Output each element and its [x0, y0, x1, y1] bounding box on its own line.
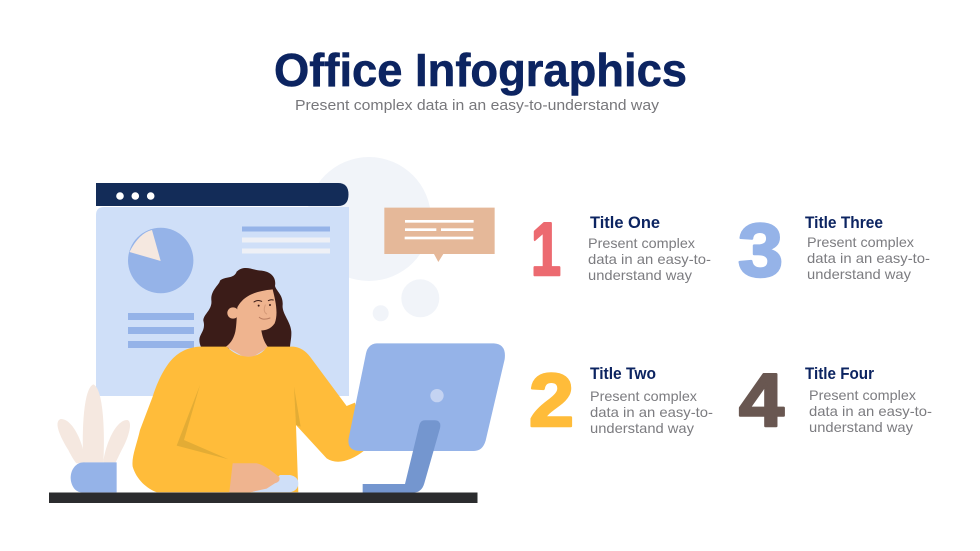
item 1 [531, 207, 711, 291]
heading: Title Four [805, 365, 875, 383]
sweater fold left [177, 385, 228, 459]
body [807, 235, 930, 282]
hair [199, 268, 291, 348]
heading: Title Two [590, 365, 656, 383]
item 4 [739, 358, 932, 442]
body: Present complex [807, 235, 914, 250]
illustration: woman at desk [49, 157, 505, 503]
speech bubble [384, 208, 495, 262]
body: understand way [590, 421, 694, 436]
item 3 [738, 208, 930, 292]
number 4: 4 [739, 358, 784, 442]
body: understand way [588, 268, 692, 283]
body: Present complex [809, 388, 916, 403]
face details [254, 300, 273, 319]
body [588, 236, 711, 283]
background circles [307, 157, 439, 321]
ear [227, 307, 239, 319]
desk [49, 492, 478, 503]
monitor [348, 343, 505, 493]
subtitle: Present complex data in an easy-to-understand way [295, 98, 660, 114]
text lines left [128, 313, 194, 348]
number 3: 3 [738, 208, 783, 292]
body: data in an easy-to- [807, 251, 930, 266]
number 1: 1 [531, 207, 561, 291]
item 2 [529, 358, 713, 442]
body: Present complex [588, 236, 695, 251]
hand [229, 463, 280, 492]
title: Office Infographics [274, 44, 687, 96]
body: understand way [809, 420, 913, 435]
heading: Title One [590, 214, 660, 232]
body: data in an easy-to- [809, 404, 932, 419]
number 2: 2 [529, 358, 574, 442]
sweater fold right [294, 387, 301, 427]
body [809, 388, 932, 435]
heading: Title Three [805, 214, 883, 232]
text lines right [242, 226, 330, 254]
body: data in an easy-to- [590, 405, 713, 420]
mouse [251, 475, 298, 492]
person [132, 268, 365, 492]
body: Present complex [590, 389, 697, 404]
neck and face [226, 289, 277, 357]
sweater [132, 347, 365, 492]
plant [58, 384, 130, 492]
body [590, 389, 713, 436]
pie chart [128, 228, 193, 293]
body: understand way [807, 267, 911, 282]
body: data in an easy-to- [588, 252, 711, 267]
browser window panel [96, 183, 349, 396]
